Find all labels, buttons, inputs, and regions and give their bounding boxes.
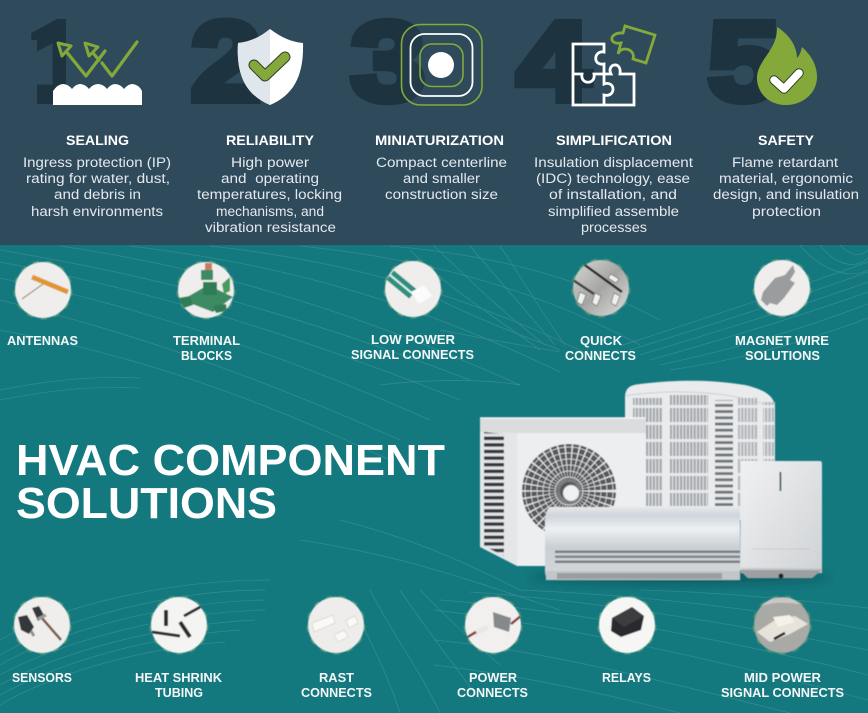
component: mid power signal connects (721, 596, 844, 700)
label: magnet wire solutions: SOLUTIONS (745, 349, 820, 363)
photo: power connects (464, 596, 522, 654)
label: terminal blocks: BLOCKS (181, 349, 232, 363)
text: miniaturization description: construction size (385, 187, 498, 202)
wall-mounted indoor unit (545, 507, 740, 580)
label: heat shrink tubing (135, 671, 222, 700)
photo: antennas (14, 261, 72, 319)
heading: reliability: RELIABILITY (226, 132, 315, 148)
label: terminal blocks (173, 334, 240, 363)
heading: HVAC component solutions: SOLUTIONS (16, 479, 277, 528)
number 1: 1 (27, 0, 99, 124)
number 4: 4 (517, 0, 590, 124)
panel: HVAC components background (0, 245, 868, 713)
icon: shield with check (238, 29, 303, 105)
label: mid power signal connects (721, 671, 844, 700)
label: sensors: SENSORS (12, 671, 72, 685)
component: RAST connects (301, 596, 372, 700)
icon: concentric rounded squares (402, 24, 482, 105)
back condenser unit (625, 381, 775, 520)
label: mid power signal connects: SIGNAL CONNECTS (721, 686, 844, 700)
text: safety description: material, ergonomic (719, 171, 853, 186)
feature: sealing (24, 19, 170, 216)
label: magnet wire solutions: MAGNET WIRE (735, 334, 829, 348)
component: relays (598, 596, 656, 685)
label: low power signal connects (351, 333, 474, 362)
feature: simplification (517, 0, 693, 235)
component: quick connects (565, 259, 636, 363)
heading: simplification: SIMPLIFICATION (556, 132, 672, 148)
text: reliability description: mechanisms, and (216, 204, 324, 219)
label: power connects (457, 671, 528, 700)
text: sealing description (23, 155, 171, 219)
text: sealing description: and debris in (54, 187, 141, 202)
label: heat shrink tubing: HEAT SHRINK (135, 671, 222, 685)
component: sensors (12, 596, 72, 685)
component: antennas (7, 261, 78, 348)
number 3: 3 (351, 0, 425, 124)
label: power connects: CONNECTS (457, 686, 528, 700)
text: reliability description: vibration resistance (205, 220, 336, 235)
text: simplification description: processes (581, 220, 647, 235)
feature: miniaturization (351, 0, 507, 202)
text: miniaturization description (376, 155, 507, 202)
photo: mid power signal connects (753, 596, 811, 654)
photo: low power signal connects (384, 260, 442, 318)
component: power connects (457, 596, 528, 700)
icon: puzzle pieces (573, 26, 655, 105)
label: quick connects: CONNECTS (565, 349, 636, 363)
text: safety description (713, 155, 859, 219)
text: simplification description: of installation, and (549, 187, 677, 202)
text: sealing description: rating for water, dust, (26, 171, 170, 186)
panel: key features (0, 0, 868, 245)
outdoor fan unit (480, 418, 646, 566)
icon: flame with check (757, 27, 817, 105)
text: simplification description: simplified assemble (548, 204, 679, 219)
heading: HVAC component solutions: HVAC COMPONENT (16, 436, 445, 485)
heading: sealing: SEALING (66, 132, 129, 148)
text: safety description: protection (752, 204, 821, 219)
label: power connects: POWER (469, 671, 517, 685)
feature: safety (708, 0, 859, 219)
component: terminal blocks (173, 261, 240, 363)
photo: relays (598, 596, 656, 654)
text: simplification description: (IDC) technology, ease (536, 171, 690, 186)
text: reliability description: temperatures, locking (197, 187, 342, 202)
photo: terminal blocks (177, 261, 235, 319)
heading: HVAC component solutions (16, 436, 445, 528)
text: sealing description: harsh environments (31, 204, 163, 219)
text: simplification description: Insulation displacement (534, 155, 693, 170)
heading: safety: SAFETY (758, 132, 815, 148)
photo: sensors (13, 596, 71, 654)
text: reliability description: High power (231, 155, 310, 170)
label: RAST connects (301, 671, 372, 700)
label: magnet wire solutions (735, 334, 829, 363)
white wall panel unit (740, 461, 822, 578)
text: simplification description (534, 155, 693, 235)
label: mid power signal connects: MID POWER (744, 671, 821, 685)
illustration: HVAC units (480, 381, 830, 585)
heading: miniaturization: MINIATURIZATION (375, 132, 504, 148)
label: quick connects: QUICK (580, 334, 622, 348)
text: safety description: design, and insulation (713, 187, 859, 202)
component: low power signal connects (351, 260, 474, 362)
label: terminal blocks: TERMINAL (173, 334, 240, 348)
icon: sealing surface deflecting particles (53, 42, 142, 105)
photo: magnet wire solutions (753, 259, 811, 317)
label: low power signal connects: SIGNAL CONNECTS (351, 348, 474, 362)
text: sealing description: Ingress protection (IP) (23, 155, 171, 170)
label: RAST connects: CONNECTS (301, 686, 372, 700)
label: relays: RELAYS (602, 671, 651, 685)
number 5: 5 (708, 0, 780, 124)
fan grille (522, 444, 616, 538)
photo: RAST connects (307, 596, 365, 654)
label: low power signal connects: LOW POWER (371, 333, 455, 347)
feature: reliability (191, 0, 342, 235)
text: miniaturization description: and smaller (403, 171, 481, 186)
component: heat shrink tubing (135, 596, 222, 700)
text: miniaturization description: Compact centerline (376, 155, 507, 170)
text: reliability description (197, 155, 342, 235)
label: antennas: ANTENNAS (7, 334, 78, 348)
label: RAST connects: RAST (319, 671, 354, 685)
label: quick connects (565, 334, 636, 363)
photo: quick connects (572, 259, 630, 317)
text: reliability description: and operating (221, 171, 319, 186)
photo: heat shrink tubing (150, 596, 208, 654)
component: magnet wire solutions (735, 259, 829, 363)
label: heat shrink tubing: TUBING (155, 686, 203, 700)
text: safety description: Flame retardant (732, 155, 838, 170)
number 2: 2 (191, 0, 261, 124)
